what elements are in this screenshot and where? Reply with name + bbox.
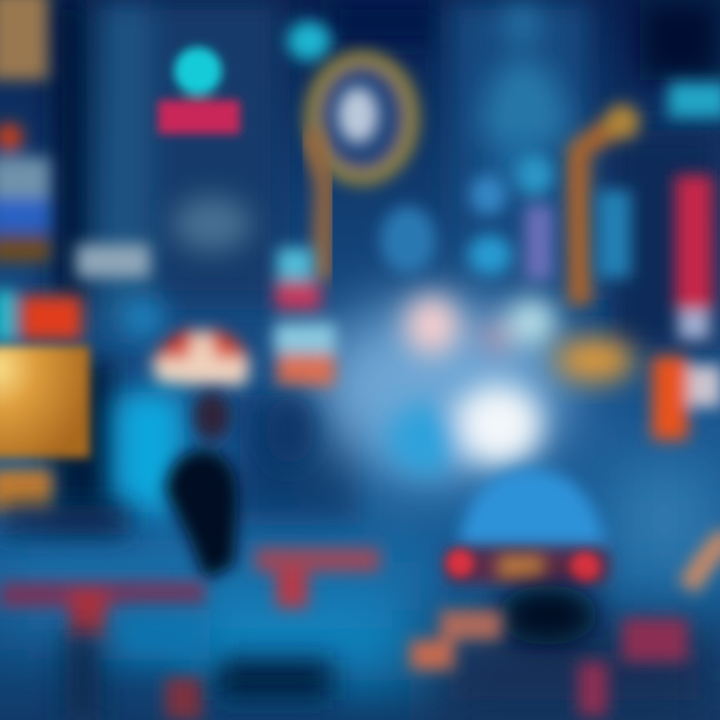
sign: stacked centre signs (274, 248, 336, 386)
sign: gold ring clock (312, 58, 412, 178)
left signs column (0, 0, 82, 512)
road: pale central haze (0, 300, 720, 720)
sign: lower amber block (0, 470, 52, 512)
sign: blue-grey panel (0, 157, 50, 203)
lights: orange car glow (555, 338, 635, 382)
post: orange lamp pole left (310, 130, 325, 280)
panel: cyan glow behind figure (114, 392, 184, 512)
umbrella: red and white (152, 328, 250, 385)
sign: grey rectangle (76, 244, 150, 278)
sign: top-left tan panel (0, 0, 48, 80)
sign: bright blue panel (0, 198, 50, 232)
sign: red vertical banner (675, 175, 713, 340)
light: cyan top lamp (287, 21, 331, 61)
lights: centre white and pink glows (266, 295, 556, 476)
sign: cyan strip (0, 290, 14, 342)
figure: dark person silhouette (165, 392, 238, 580)
sign: dark orange panel (0, 236, 50, 262)
windows: right blue cluster (380, 155, 631, 280)
post: orange lamp pole right (578, 104, 640, 305)
sign: faint grey-blue glow (172, 196, 252, 252)
sign: small red light (0, 123, 23, 151)
road: dark foreground shapes (0, 505, 333, 720)
sign: cyan circle and red banner (158, 47, 240, 134)
sign: glowing amber block (0, 346, 90, 458)
sign: red panel (20, 296, 82, 340)
vehicle: blue car (445, 468, 610, 645)
background: dark building columns (50, 0, 720, 530)
sign: top-right cyan bar (668, 82, 720, 118)
barrier: red road markers (0, 548, 688, 720)
light: small blue glow (120, 298, 164, 338)
road: right curved orange streak (688, 535, 720, 588)
figure: translucent blue statue (480, 4, 570, 190)
sign: orange and white right panel (652, 356, 720, 440)
